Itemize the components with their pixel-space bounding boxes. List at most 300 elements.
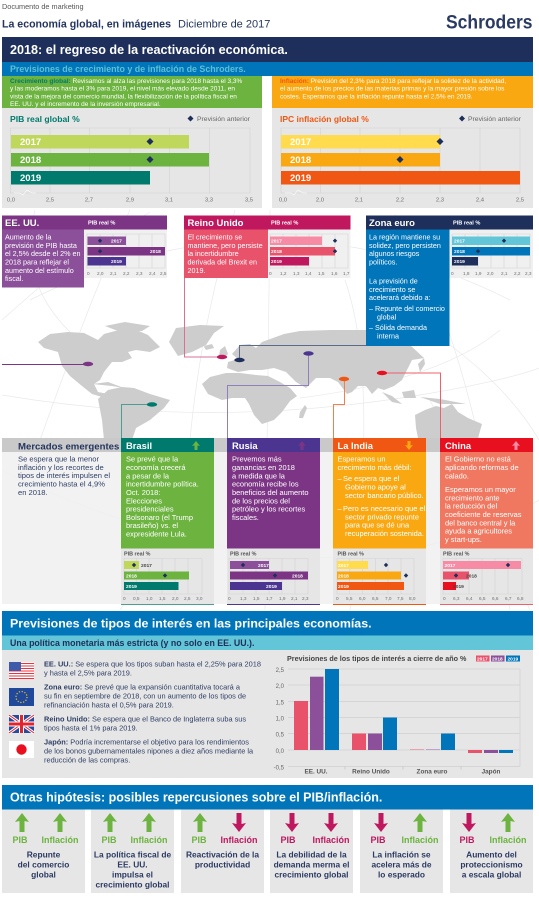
- section heading: tipos de interes: Previsiones de tipos de interés en las principales economías.: [10, 616, 372, 630]
- mini chart: 2017: [258, 563, 269, 569]
- panel: Rusia: economía recibe los: [232, 480, 299, 489]
- chart: tipos de interes: EE. UU.: [304, 768, 328, 776]
- subheading: politica monetaria: [2, 636, 533, 650]
- panel: inflacion text: costes. Esperamos que la inflación repunte hasta el 2,5% en 2019.: [280, 93, 473, 100]
- mini chart: 8,0: [409, 596, 416, 601]
- chart: tipos de interes: 0,5: [276, 732, 285, 738]
- panel: Rusia: ganancias en 2018: [232, 463, 295, 472]
- mini chart: 0: [228, 596, 231, 601]
- mercados band: [2, 438, 533, 452]
- subtitle bar: Previsiones de crecimiento y de inflación de Schroders.: [10, 64, 246, 74]
- panel: Brasil: brasileño) vs. el: [126, 521, 178, 530]
- mini chart: 2,1: [291, 596, 298, 601]
- panel: Brasil: Se prevé que la: [126, 454, 179, 464]
- panel: Rusia: a medida que la: [232, 471, 286, 480]
- mini chart: 1,5: [253, 596, 260, 601]
- panel: Brasil: expresidente Lula.: [126, 529, 187, 538]
- mini chart: 0: [451, 271, 454, 276]
- panel: Zona euro: La previsión de: [369, 276, 418, 286]
- text: zona euro: Zona euro: Se prevé que la expansión cuantitativa tocará a: [44, 682, 241, 691]
- panel: Rusia: [227, 438, 320, 605]
- panel: Brasil: Brasil: [126, 440, 152, 451]
- card: repunte del comercio: PIB: [12, 835, 28, 845]
- panel: Reino Unido: 2019.: [188, 266, 206, 275]
- mini chart: 2017: [271, 239, 282, 245]
- chart: PIB real global: Previsión anterior: [197, 116, 251, 123]
- mini chart: 2,3: [525, 271, 532, 276]
- card: debilidad demanda: PIB: [280, 835, 296, 845]
- chart: tipos de interes: 0,0: [276, 749, 285, 755]
- card: reactivacion productividad: PIB: [191, 835, 207, 845]
- chart: IPC inflacion global: IPC inflación global %: [280, 114, 369, 124]
- mini chart: 1,7: [343, 271, 350, 276]
- panel: La India: Pero es necesario que el: [343, 504, 426, 513]
- card: proteccionismo: PIB: [459, 835, 475, 845]
- panel: Zona euro: Repunte del comercio: [375, 304, 445, 313]
- chart: IPC inflacion global: [272, 108, 533, 208]
- panel: China: del banco central y la: [445, 518, 516, 528]
- chart: PIB real global: 2,7: [85, 198, 93, 204]
- card: proteccionismo: [450, 810, 533, 893]
- panel: inflacion text: Inflación: Previsión del 2,3% para 2018 para reflejar la solidez de la actividad,: [280, 78, 506, 85]
- text: reino unido: Reino Unido: Se espera que el Banco de Inglaterra suba sus: [44, 714, 246, 723]
- panel: crecimiento global text: [2, 76, 262, 108]
- chart: IPC inflacion global: 2019: [290, 173, 311, 184]
- panel: interest rates background: [2, 650, 533, 778]
- heading: mercados emergentes: tipos de interés impulsen el: [18, 471, 110, 480]
- card: debilidad demanda: [270, 810, 353, 893]
- header: Diciembre de 2017: [178, 18, 270, 30]
- heading: mercados emergentes: en 2018.: [18, 488, 48, 497]
- card: debilidad demanda: demanda merma el: [274, 860, 349, 870]
- title banner: [2, 37, 533, 62]
- mini chart: 2018: [338, 573, 349, 579]
- panel: Reino Unido: [184, 216, 350, 278]
- chart: PIB real global: 2019: [20, 173, 41, 184]
- mini chart: PIB real %: [124, 552, 151, 558]
- card: debilidad demanda: crecimiento global: [274, 870, 348, 880]
- panel: EE. UU.: Aumento de la: [5, 232, 51, 242]
- chart: PIB real global: 0,0: [7, 198, 16, 204]
- mini chart: [121, 548, 214, 605]
- mini chart: 6,5: [372, 596, 379, 601]
- mini chart: 2019: [454, 259, 465, 265]
- panel: Brasil: [121, 438, 214, 605]
- mini chart: 2017: [338, 563, 349, 569]
- mini chart: 5,5: [346, 596, 353, 601]
- card: politica fiscal: EE. UU.: [117, 860, 148, 870]
- greenland: [169, 325, 224, 356]
- mini chart: 1,4: [305, 271, 312, 276]
- card: inflacion se acelera: acelera más de: [371, 860, 432, 870]
- mini chart: 6,7: [505, 596, 512, 601]
- card: repunte del comercio: global: [31, 870, 56, 880]
- panel: EE. UU.: 2018 para reflejar el: [5, 258, 69, 266]
- panel: La India: recuperación sostenida.: [345, 529, 424, 538]
- panel: China: y start-ups.: [445, 535, 482, 544]
- chart: tipos de interes: Zona euro: [417, 768, 448, 776]
- mini chart: 1,5: [318, 271, 325, 276]
- card: reactivacion productividad: Reactivación de la: [186, 850, 259, 860]
- flag: Japan: [9, 741, 34, 758]
- mini chart: 6,4: [466, 596, 473, 601]
- flag: UK: [9, 715, 34, 733]
- chart: PIB real global: 2018: [20, 155, 41, 166]
- panel: Zona euro: políticos.: [369, 258, 397, 266]
- flag: USA: [9, 662, 34, 679]
- mini chart: 2018: [466, 573, 477, 579]
- mini chart: 2,2: [514, 271, 521, 276]
- card: proteccionismo: Inflación: [489, 835, 527, 845]
- panel: La India: Se espera que el: [343, 474, 400, 483]
- text: reino unido: [44, 714, 246, 732]
- card: inflacion se acelera: PIB: [370, 835, 386, 845]
- mini chart: 1,3: [293, 271, 300, 276]
- mini chart: 2019: [126, 584, 137, 590]
- text: EE. UU.: EE. UU.: Se espera que los tipos suban hasta el 2,25% para 2018: [44, 659, 261, 668]
- panel: La India: [333, 438, 426, 605]
- chart: PIB real global: 3,3: [205, 198, 214, 204]
- panel: China: coeficiente de reservas: [445, 510, 522, 519]
- header: Documento de marketing: [2, 2, 84, 11]
- panel: Reino Unido: derivada del Brexit en: [188, 258, 257, 266]
- chart: tipos de interes: 1,0: [276, 716, 285, 722]
- panel: EE. UU.: [2, 216, 167, 288]
- subtitle bar: [2, 62, 533, 76]
- mini chart: [450, 230, 533, 278]
- card: politica fiscal: Inflación: [130, 835, 168, 845]
- panel: Zona euro: solidez, pero persisten: [369, 241, 441, 250]
- card: politica fiscal: La política fiscal de: [94, 850, 171, 860]
- icon: arrow down: [405, 441, 413, 450]
- panel: La India: –: [338, 474, 342, 483]
- chart: PIB real global: 2,5: [46, 198, 55, 204]
- mini chart: 7,5: [397, 596, 404, 601]
- chart: tipos de interes: 2,0: [276, 684, 285, 690]
- panel: Zona euro: –: [369, 323, 373, 332]
- panel: La India: sector bancario público.: [345, 491, 424, 500]
- panel: China: China: [445, 440, 472, 451]
- chart: IPC inflacion global: 0,0: [279, 198, 288, 204]
- card: repunte del comercio: Inflación: [41, 835, 79, 845]
- mini chart: 6,6: [492, 596, 499, 601]
- panel: crecimiento global text: Crecimiento global: Revisamos al alza las previsiones para 2018 hasta el 3,3%: [10, 78, 243, 85]
- mini chart: 1,0: [146, 596, 153, 601]
- panel: La India: Esperamos un: [338, 454, 385, 464]
- title banner: 2018: el regreso de la reactivación económica.: [10, 43, 288, 57]
- mini chart: 1,3: [240, 596, 247, 601]
- card: politica fiscal: impulsa el: [112, 870, 153, 880]
- chart: IPC inflacion global: 2,5: [516, 198, 525, 204]
- mini chart: 0: [87, 271, 90, 276]
- mini chart: 2019: [338, 584, 349, 590]
- chart: IPC inflacion global: 2,0: [316, 198, 325, 204]
- mini chart: PIB real %: [443, 552, 470, 558]
- chart: tipos de interes: Japón: [482, 768, 501, 776]
- panel: Brasil: incertidumbre política.: [126, 480, 199, 489]
- heading: mercados emergentes: Mercados emergentes: [18, 442, 119, 452]
- connector lines: [2, 278, 440, 604]
- chart: IPC inflacion global: 2,3: [436, 198, 445, 204]
- panel: crecimiento global text: vista de la mejora del comercio mundial, la flexibilización de la política fiscal en: [10, 93, 237, 100]
- card: proteccionismo: proteccionismo: [460, 860, 523, 870]
- panel: Rusia: fiscales.: [232, 513, 259, 522]
- panel: EE. UU.: aumento del estímulo: [5, 266, 74, 275]
- mini chart: [440, 548, 533, 605]
- panel: Reino Unido: PIB real %: [271, 220, 298, 226]
- panel: Zona euro: crecimiento se: [369, 285, 415, 294]
- panel: China: Esperamos un mayor: [445, 485, 516, 494]
- panel: Zona euro: Zona euro: [369, 218, 415, 229]
- panel: Zona euro: acelerará debido a:: [369, 293, 431, 302]
- mercados panel background: [2, 452, 533, 604]
- chart: PIB real global: 3,1: [165, 198, 173, 204]
- chart: tipos de interes: -0,5: [274, 766, 285, 772]
- panel: Zona euro: interna: [377, 331, 399, 340]
- chart: tipos de interes: [274, 654, 520, 776]
- mini chart: 2,3: [302, 596, 309, 601]
- mini chart: 1,9: [279, 596, 286, 601]
- panel: Reino Unido: Reino Unido: [188, 218, 244, 229]
- mini chart: 6,5: [479, 596, 486, 601]
- chart: PIB real global: PIB real global %: [10, 114, 80, 124]
- mini chart: 1,9: [475, 271, 482, 276]
- panel: La India: Gobierno apoye al: [345, 482, 406, 492]
- panel: Rusia: Rusia: [232, 440, 258, 451]
- mini chart: 6,8: [517, 596, 524, 601]
- chart: IPC inflacion global: 2,4: [476, 198, 485, 204]
- chart: PIB real global: 2,9: [126, 198, 134, 204]
- mini chart: 1,5: [159, 596, 166, 601]
- text: japon: Japón: Podría incrementarse el objetivo para los rendimientos: [44, 737, 249, 746]
- south america: [98, 387, 170, 440]
- mini chart: [333, 548, 426, 605]
- panel: Brasil: economía crecerá: [126, 463, 186, 472]
- card: proteccionismo: Aumento del: [466, 850, 517, 860]
- mini chart: 0: [269, 271, 272, 276]
- chart: PIB real global: 3,5: [245, 198, 254, 204]
- panel: China: aplicando reformas de: [445, 463, 519, 472]
- panel: Brasil: Elecciones: [126, 496, 162, 505]
- card: politica fiscal: [91, 810, 174, 893]
- text: zona euro: [44, 682, 246, 709]
- card: inflacion se acelera: La inflación se: [372, 850, 431, 860]
- chart: tipos de interes: 2,5: [276, 668, 285, 674]
- card: politica fiscal: crecimiento global: [96, 880, 170, 890]
- mini chart: [268, 230, 350, 278]
- mini chart: 2017: [454, 239, 465, 245]
- panel: Brasil: Oct. 2018:: [126, 488, 160, 497]
- icon: arrow up: [512, 441, 520, 450]
- panel: China: crecimiento ante: [445, 494, 500, 502]
- header: [2, 2, 270, 30]
- card: politica fiscal: PIB: [101, 835, 117, 845]
- panel: Brasil: a pesar de la: [126, 471, 170, 480]
- legend: 2017: [477, 656, 488, 662]
- legend: 2018: [492, 656, 503, 662]
- section heading: otras hipotesis: [2, 785, 533, 810]
- chart: IPC inflacion global: Previsión anterior: [468, 116, 522, 123]
- mini chart: 2017: [444, 563, 456, 569]
- mini chart: 2019: [111, 259, 122, 265]
- chart: PIB real global: [2, 108, 262, 208]
- mini chart: 1,8: [463, 271, 470, 276]
- mini chart: 2,4: [149, 271, 156, 276]
- card: reactivacion productividad: productividad: [195, 860, 250, 870]
- panel: EE. UU.: previsión de PIB hasta: [5, 241, 77, 250]
- mini chart: 2019: [266, 584, 277, 590]
- section heading: tipos de interes: [2, 611, 533, 636]
- card: inflacion se acelera: lo esperado: [378, 870, 425, 880]
- mini chart: 2,5: [184, 596, 191, 601]
- panel: EE. UU.: EE. UU.: [5, 218, 39, 229]
- mini chart: 2018: [292, 573, 303, 579]
- mini chart: 2,1: [110, 271, 117, 276]
- mini chart: 1,2: [280, 271, 287, 276]
- mini chart: 2018: [454, 249, 465, 255]
- subheading: politica monetaria: Una política monetaria más estricta (y no solo en EE. UU.).: [10, 638, 254, 648]
- panel: EE. UU.: PIB real %: [88, 220, 115, 226]
- mini chart: 2,0: [97, 271, 104, 276]
- panel: China: calado.: [445, 472, 469, 480]
- card: inflacion se acelera: [360, 810, 443, 893]
- africa: [202, 373, 297, 424]
- card: debilidad demanda: Inflación: [312, 835, 350, 845]
- panel: crecimiento global text: y las moderamos hasta el 3% para 2019, el nivel más elevado desde 2011, en: [10, 86, 235, 93]
- panel: Reino Unido: la incertidumbre: [188, 249, 239, 258]
- mini chart: 0,5: [133, 596, 140, 601]
- text: japon: de los bonos gubernamentales nipones a diez años mediante la: [44, 746, 254, 755]
- panel: China: la reducción del: [445, 502, 497, 510]
- heading: mercados emergentes: Se espera que la menor: [18, 454, 100, 464]
- text: zona euro: su fin en septiembre de 2018, con un aumento de los tipos de: [44, 691, 246, 700]
- panel: Zona euro: global: [377, 312, 397, 321]
- mini chart: [84, 230, 167, 278]
- panel: China: El Gobierno no está: [445, 454, 512, 464]
- mini chart: 0: [123, 596, 126, 601]
- mini chart: 2,3: [136, 271, 143, 276]
- panel: Zona euro: [366, 216, 533, 346]
- text: EE. UU.: y hasta el 2,5% para 2019.: [44, 668, 132, 677]
- card: debilidad demanda: La debilidad de la: [276, 850, 347, 860]
- eurasia: [227, 330, 424, 394]
- card: repunte del comercio: Repunte: [27, 850, 61, 860]
- mini chart: [227, 548, 320, 605]
- panel: La India: –: [338, 504, 342, 513]
- panel: Zona euro: algunos riesgos: [369, 249, 420, 258]
- legend: [476, 656, 520, 662]
- panel: Rusia: beneficios del aumento: [232, 488, 308, 497]
- mini chart: 2,1: [501, 271, 508, 276]
- panel: China: ayuda a agricultores: [445, 526, 512, 536]
- panel: Zona euro: Sólida demanda: [375, 323, 427, 332]
- chart: IPC inflacion global: 2017: [290, 137, 311, 148]
- chart: PIB real global: 2017: [20, 137, 41, 148]
- world map background: [2, 210, 539, 610]
- panel: Rusia: petróleo y los recortes: [232, 504, 305, 514]
- panel: inflacion text: [272, 76, 533, 108]
- flag: EU: [9, 688, 34, 706]
- panel: China: [440, 438, 533, 605]
- panel: La India: para que se dé una: [345, 520, 410, 530]
- icon: arrow up: [192, 441, 200, 450]
- heading: mercados emergentes: [18, 442, 119, 497]
- text: EE. UU.: [44, 659, 261, 677]
- mini chart: 2,0: [172, 596, 179, 601]
- chart: IPC inflacion global: 2,1: [355, 198, 363, 204]
- mini chart: 2017: [141, 563, 152, 569]
- panel: Zona euro: La región mantiene su: [369, 232, 440, 242]
- text: zona euro: refinanciación hasta el 0,5% para 2019.: [44, 700, 174, 709]
- text: japon: reducción de las compras.: [44, 755, 130, 764]
- mini chart: PIB real %: [338, 552, 364, 558]
- heading: mercados emergentes: inflación y los recortes de: [18, 463, 104, 472]
- panel: EE. UU.: fiscal.: [5, 274, 23, 283]
- mini chart: 2018: [271, 249, 282, 255]
- panel: La India: crecimiento más débil:: [338, 463, 412, 472]
- panel: crecimiento global text: EE. UU. y el incremento de la inversión empresarial.: [10, 101, 161, 108]
- north america: [38, 328, 160, 399]
- chart: IPC inflacion global: 2,2: [396, 198, 404, 204]
- mini chart: 6,0: [359, 596, 366, 601]
- card: repunte del comercio: del comercio: [18, 860, 69, 870]
- card: reactivacion productividad: [181, 810, 264, 893]
- chart: IPC inflacion global: 2018: [290, 155, 311, 166]
- panel: Rusia: Prevemos más: [232, 454, 282, 464]
- panel: Rusia: de los precios del: [232, 496, 290, 505]
- icon: arrow up: [298, 441, 306, 450]
- mini chart: 2018: [150, 249, 161, 255]
- legend: 2019: [508, 656, 519, 662]
- mini chart: 6,3: [453, 596, 460, 601]
- mini chart: 2,5: [160, 271, 167, 276]
- text: reino unido: tipos hasta el 1% para 2019.: [44, 723, 138, 732]
- panel: La India: sector privado repunte: [345, 512, 419, 522]
- chart: tipos de interes: 1,5: [276, 700, 285, 706]
- uk & iceland: [219, 346, 228, 358]
- panel: Reino Unido: mantiene, pero persiste: [188, 241, 263, 250]
- card: repunte del comercio: [2, 810, 85, 893]
- mini chart: 2019: [453, 584, 464, 590]
- panel: inflacion text: el aumento de los precios de las materias primas y la mayor presión sobre los: [280, 86, 505, 93]
- card: inflacion se acelera: Inflación: [401, 835, 439, 845]
- mini chart: 3,0: [196, 596, 203, 601]
- panel: La India: La India: [338, 440, 374, 451]
- section heading: otras hipotesis: Otras hipótesis: posibles repercusiones sobre el PIB/inflación.: [10, 790, 382, 804]
- panel: Zona euro: PIB real %: [453, 220, 480, 226]
- card: proteccionismo: a escala global: [462, 870, 521, 880]
- mini chart: 1,7: [266, 596, 273, 601]
- heading: mercados emergentes: crecimiento hasta el 4,9%: [18, 479, 105, 488]
- mini chart: 2,0: [487, 271, 494, 276]
- mini chart: 2017: [111, 239, 122, 245]
- mini chart: 0: [443, 596, 446, 601]
- panel: Brasil: Bolsonaro (el Trump: [126, 513, 193, 522]
- mini chart: 2,2: [123, 271, 130, 276]
- panel: Reino Unido: El crecimiento se: [188, 232, 242, 242]
- mini chart: 0: [336, 596, 339, 601]
- se asia islands: [382, 392, 402, 404]
- mini chart: 2019: [271, 259, 282, 265]
- mini chart: 1,6: [331, 271, 338, 276]
- chart: tipos de interes: Reino Unido: [352, 768, 390, 776]
- header: La economía global, en imágenes: [2, 18, 171, 30]
- mini chart: PIB real %: [230, 552, 257, 558]
- text: japon: [44, 737, 254, 764]
- mini chart: 2018: [126, 573, 137, 579]
- panel: Zona euro: –: [369, 304, 373, 313]
- mini chart: 7,0: [385, 596, 392, 601]
